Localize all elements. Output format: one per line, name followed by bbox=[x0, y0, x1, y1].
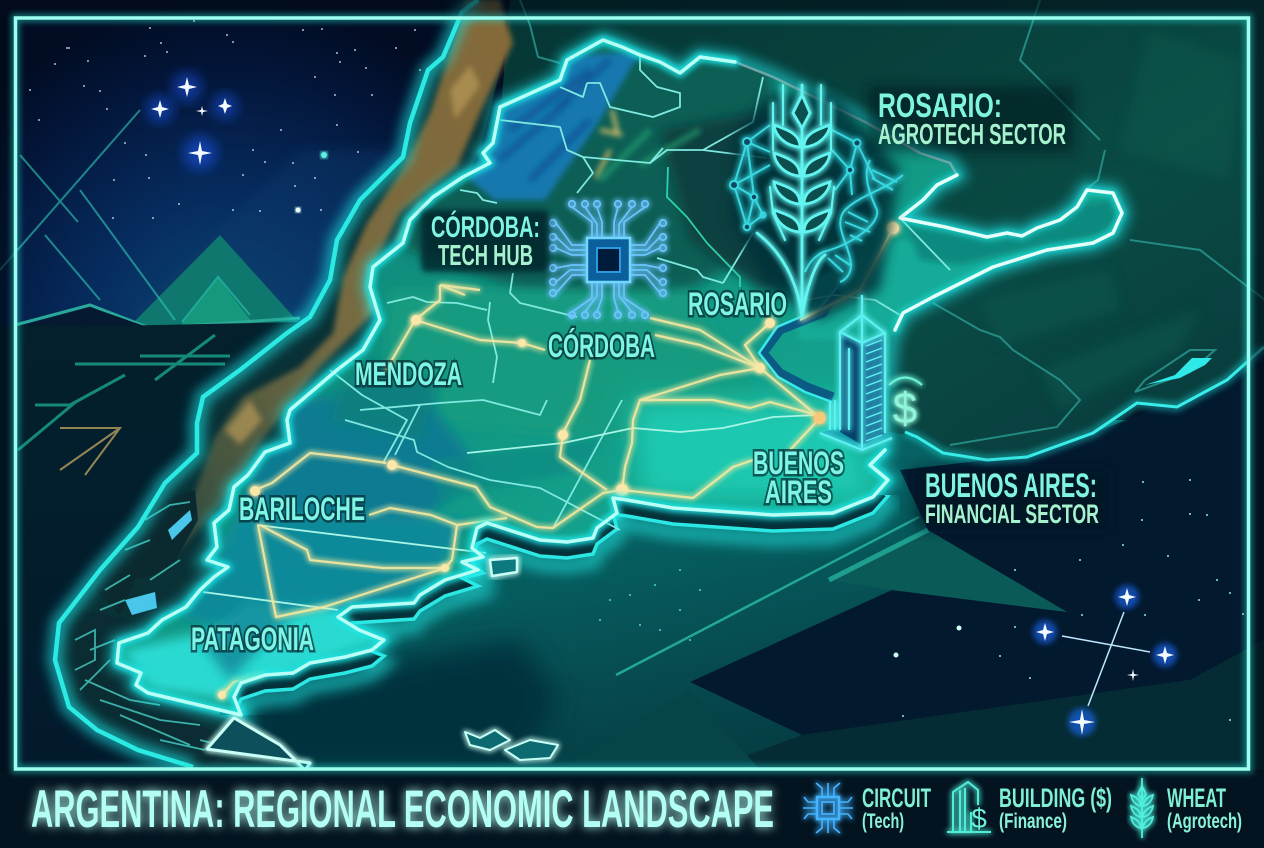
province borders bbox=[203, 55, 950, 610]
label: Buenos Aires city: BUENOS bbox=[753, 445, 844, 481]
legend icon: dollar sign: $ bbox=[971, 803, 987, 834]
label: Rosario agrotech sector: ROSARIO: bbox=[878, 87, 1002, 125]
legend text: circuit bbox=[862, 783, 931, 833]
legend icon: building bbox=[947, 782, 991, 832]
label: Bariloche: BARILOCHE bbox=[239, 491, 365, 527]
road network bbox=[222, 228, 893, 695]
label: Patagonia: PATAGONIA bbox=[191, 621, 314, 657]
icon: skyscraper with dollar sign (Buenos Aires finance) bbox=[820, 295, 922, 452]
Andes and Chile strip bbox=[55, 0, 513, 767]
Chile outer glowing coast bbox=[55, 0, 478, 767]
Malvinas islands bbox=[465, 730, 558, 760]
peninsula Valdes and Tierra del Fuego bbox=[207, 558, 517, 770]
label: Cordoba: CÓRDOBA bbox=[548, 328, 655, 364]
glowing map outline bbox=[117, 40, 1122, 715]
legend text: building bbox=[999, 783, 1112, 833]
city nodes bbox=[218, 222, 899, 699]
label: Buenos Aires financial sector: FINANCIAL SECTOR bbox=[925, 499, 1099, 529]
legend bbox=[803, 778, 1242, 838]
left distant mountains and light rays bbox=[0, 110, 400, 475]
legend icon: wheat bbox=[1131, 778, 1153, 838]
constellation: upper left bbox=[146, 72, 238, 170]
label: Buenos Aires city bbox=[753, 445, 844, 510]
archipelago of southern Chile bbox=[60, 490, 260, 765]
label: Rosario agrotech sector bbox=[868, 86, 1074, 152]
legend text: wheat: WHEAT bbox=[1167, 783, 1226, 813]
coast glow behind map bbox=[117, 40, 1122, 715]
label: Rosario: ROSARIO bbox=[688, 286, 787, 322]
coast extrusion shelf bbox=[220, 495, 900, 715]
legend text: circuit: (Tech) bbox=[862, 810, 904, 833]
legend icon: circuit bbox=[803, 783, 853, 833]
label: Cordoba tech hub: CÓRDOBA: bbox=[431, 210, 540, 244]
label: Buenos Aires financial sector bbox=[915, 467, 1109, 530]
constellation: lower right bbox=[1033, 585, 1177, 736]
icon: wheat with network and DNA (Rosario agrotech) bbox=[730, 85, 903, 320]
legend text: building: BUILDING ($) bbox=[999, 783, 1112, 813]
label: Buenos Aires city: AIRES bbox=[765, 474, 832, 510]
legend text: circuit: CIRCUIT bbox=[862, 783, 931, 813]
legend text: wheat bbox=[1167, 783, 1242, 833]
Argentina map body bbox=[117, 40, 1122, 715]
neighbouring land: east bbox=[500, 0, 1264, 460]
Parana river bbox=[759, 286, 838, 402]
icon: computer chip (Cordoba tech hub) bbox=[550, 201, 666, 318]
label: Cordoba tech hub bbox=[421, 210, 549, 272]
east coastline glow bbox=[905, 347, 1264, 460]
label: Mendoza: MENDOZA bbox=[355, 356, 462, 392]
label: Buenos Aires financial sector: BUENOS AIRES: bbox=[925, 467, 1097, 505]
stars scattered in the sky bbox=[30, 21, 1243, 720]
label: Cordoba tech hub: TECH HUB bbox=[438, 240, 533, 272]
label: Rosario agrotech sector: AGROTECH SECTOR bbox=[878, 119, 1066, 151]
icon: skyscraper with dollar sign (Buenos Aires finance): $ bbox=[893, 384, 917, 433]
legend text: building: (Finance) bbox=[999, 810, 1067, 833]
footer band bbox=[0, 771, 1264, 848]
